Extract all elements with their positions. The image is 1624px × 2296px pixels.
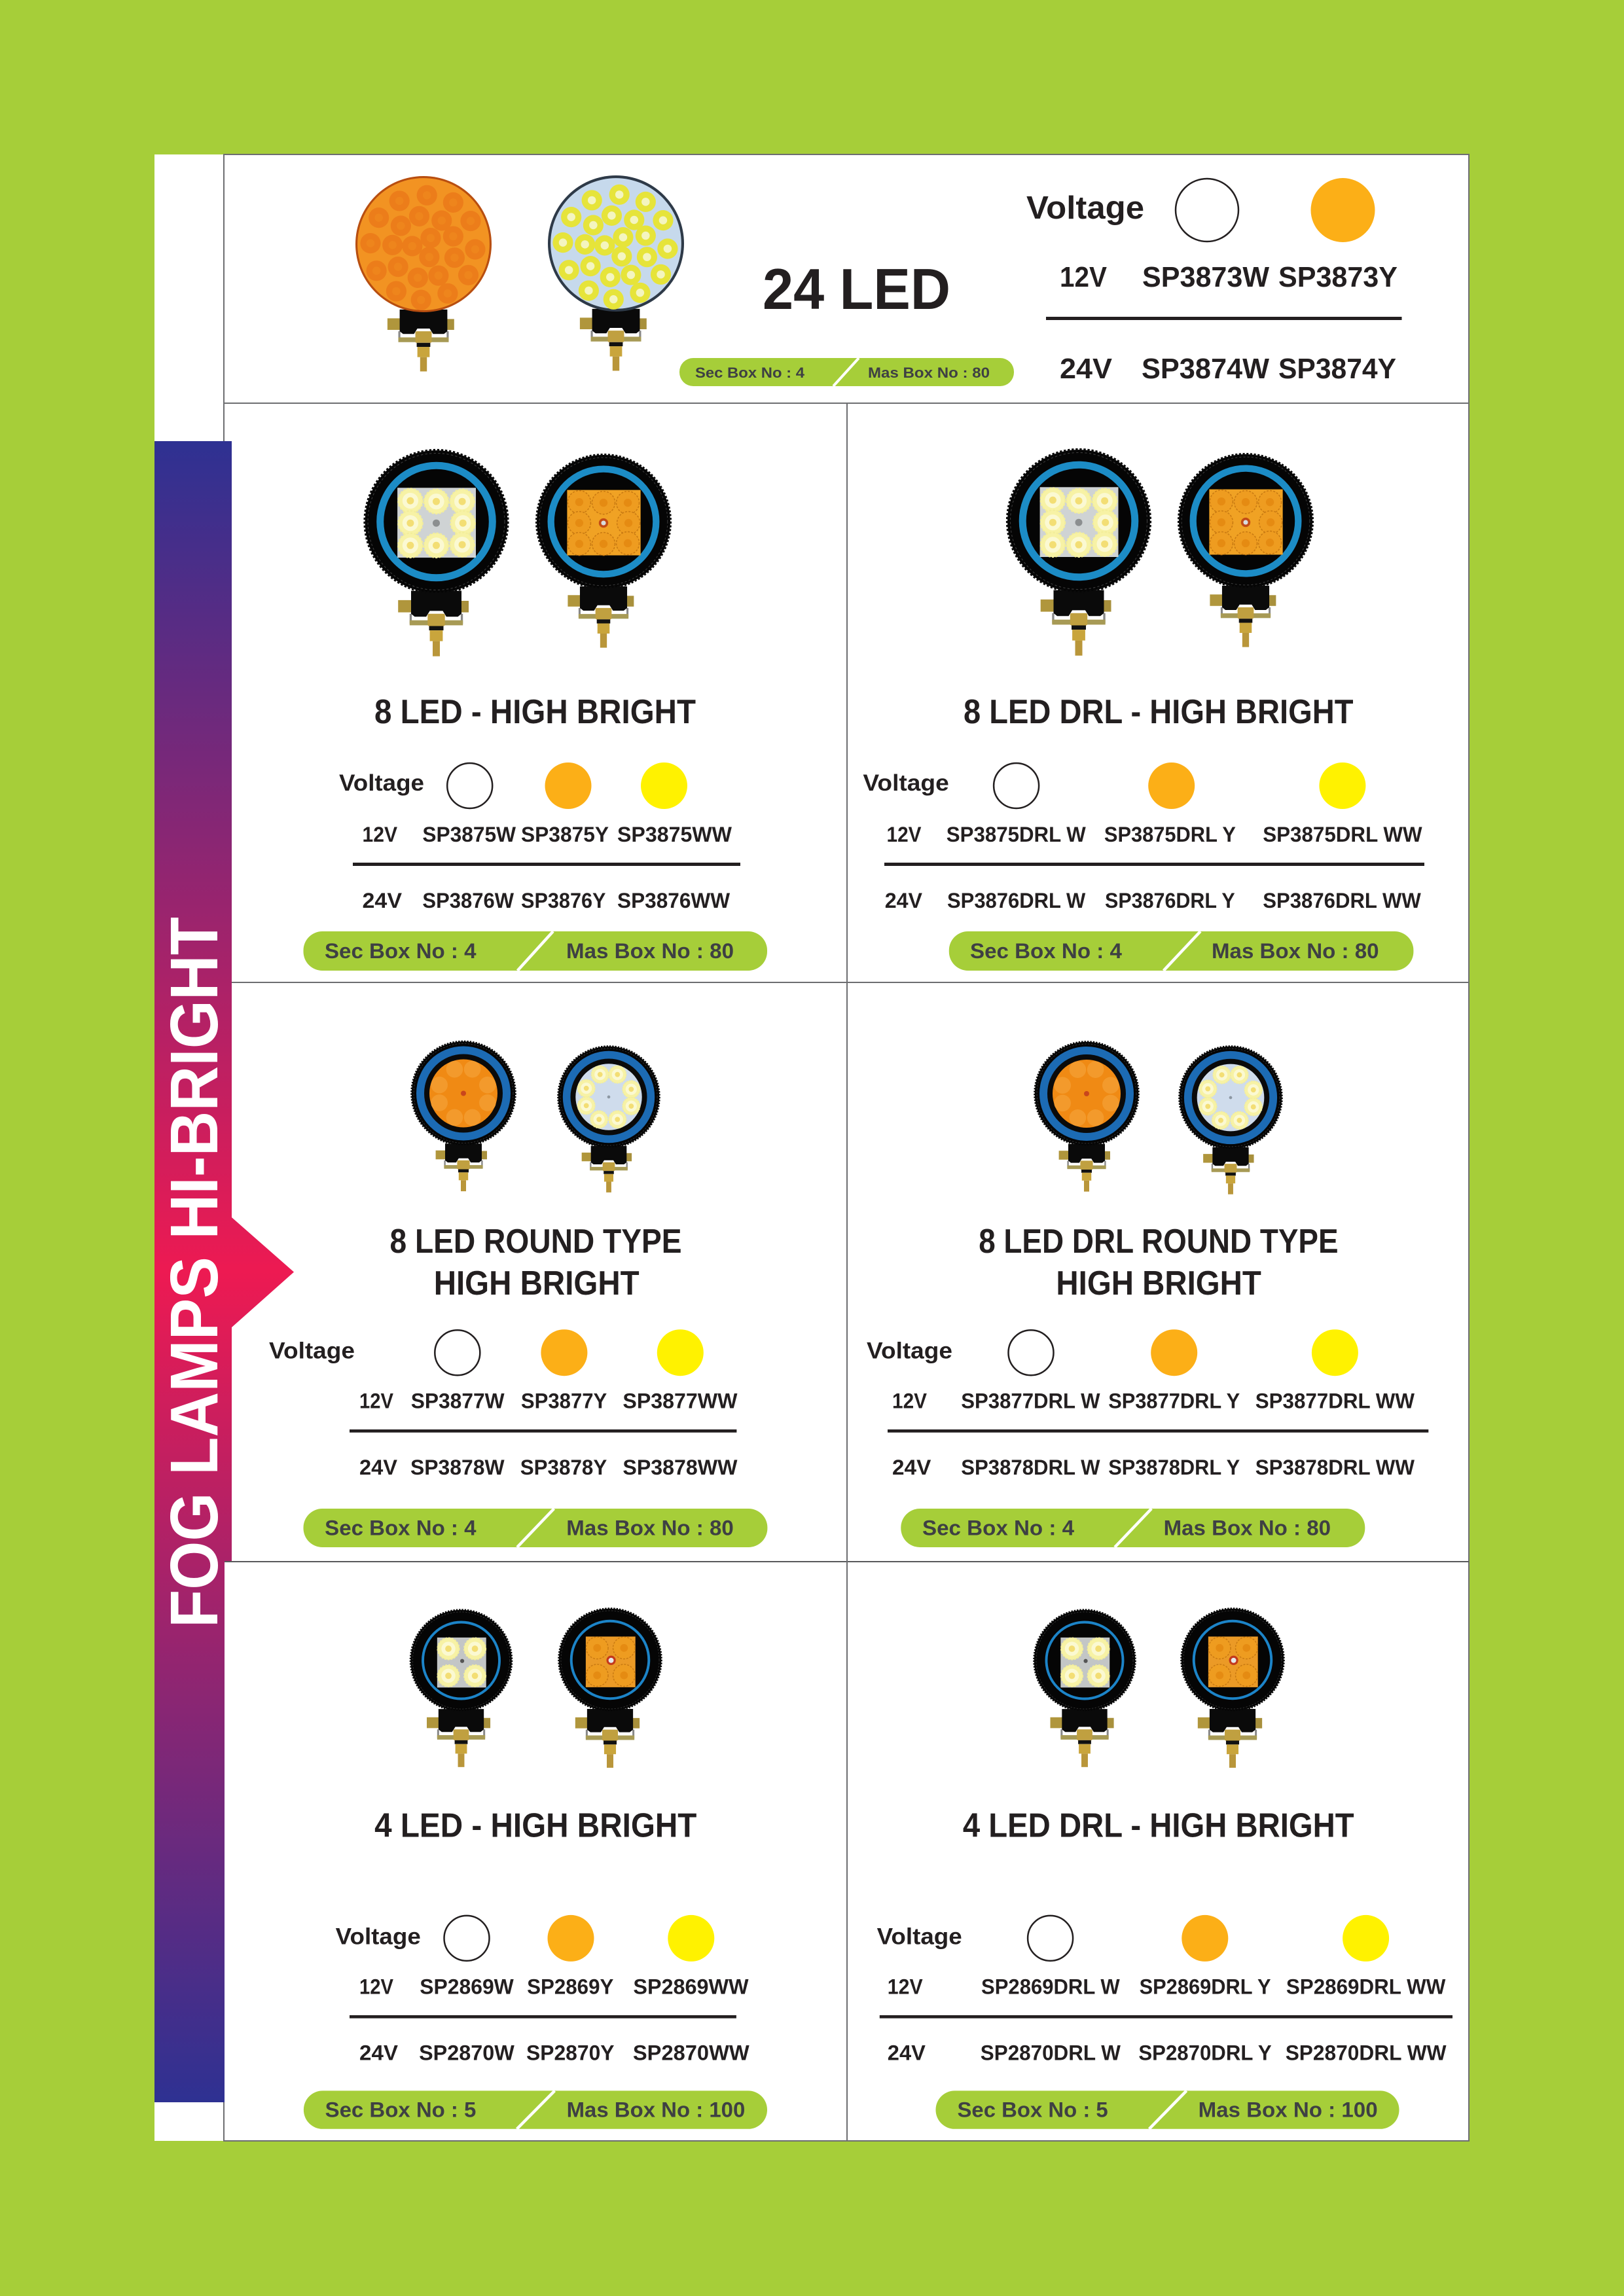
panel: 4 LED high bright (304, 1609, 767, 2129)
voltage table: SP2870DRL W (981, 2041, 1121, 2065)
sidebar banner: fog lamps hi-bright (154, 441, 294, 2102)
voltage table: SP2869DRL W (981, 1975, 1120, 1999)
icon: 24 LED amber lamp (355, 176, 492, 371)
voltage table: 12V (363, 823, 398, 846)
voltage table: SP3875DRL Y (1104, 823, 1236, 846)
voltage table: SP2869DRL WW (1286, 1975, 1446, 1999)
box quantity pill (304, 931, 767, 971)
voltage table: SP3875DRL WW (1263, 823, 1422, 846)
box quantity pill: Sec Box No : 4 (325, 1516, 477, 1539)
icon: 4 LED amber lamp (559, 1609, 661, 1768)
box quantity pill (949, 931, 1413, 971)
voltage table: SP3875W (422, 823, 516, 846)
panel: 24 LED (355, 175, 1402, 386)
voltage table: 24V (363, 889, 403, 912)
voltage table (339, 762, 740, 912)
box quantity pill (901, 1509, 1365, 1547)
box quantity pill: Mas Box No : 80 (1212, 939, 1379, 963)
box quantity pill: Mas Box No : 100 (1199, 2098, 1378, 2122)
box quantity pill: Sec Box No : 5 (325, 2098, 476, 2122)
voltage table (877, 1915, 1453, 2065)
voltage table: SP2869DRL Y (1140, 1975, 1271, 1999)
panel: 4 LED DRL high bright (877, 1609, 1453, 2129)
voltage table: 12V (1060, 261, 1108, 293)
voltage table: SP3877DRL W (961, 1389, 1100, 1412)
voltage table: Voltage (863, 770, 949, 796)
voltage table: SP3876W (422, 889, 514, 912)
voltage table: 12V (359, 1975, 394, 1999)
voltage table: SP3878Y (520, 1456, 607, 1479)
voltage table: Voltage (867, 1338, 952, 1364)
title: 24 LED: 24 LED (763, 257, 950, 321)
voltage table: SP3877W (411, 1389, 505, 1412)
icon: 8 LED DRL amber lamp (1179, 454, 1312, 647)
voltage table: SP3878DRL Y (1108, 1456, 1240, 1479)
box quantity pill: Mas Box No : 80 (566, 939, 734, 963)
heading: 8 LED ROUND TYPE (390, 1223, 682, 1261)
box quantity pill (936, 2090, 1399, 2129)
voltage table: Voltage (1026, 190, 1144, 226)
box quantity pill (304, 1509, 767, 1547)
icon: round amber lamp (412, 1041, 515, 1191)
heading: 8 LED DRL - HIGH BRIGHT (964, 693, 1354, 731)
voltage table: SP3873W (1142, 261, 1269, 293)
icon: 8 LED amber lamp (537, 455, 670, 648)
icon: 8 LED white lamp (365, 450, 507, 656)
voltage table: SP3875WW (617, 823, 732, 846)
box quantity pill (304, 2090, 767, 2129)
heading: 4 LED DRL - HIGH BRIGHT (963, 1807, 1354, 1845)
box quantity pill: Mas Box No : 80 (566, 1516, 734, 1539)
voltage table: SP2870Y (526, 2041, 614, 2065)
voltage table (269, 1329, 738, 1479)
voltage table: SP3877DRL WW (1255, 1389, 1415, 1412)
voltage table: 24V (885, 889, 923, 912)
voltage table: 24V (359, 1456, 398, 1479)
voltage table: SP2870WW (633, 2041, 750, 2065)
icon: round DRL white lamp (1180, 1047, 1282, 1194)
voltage table: SP3876DRL W (947, 889, 1086, 912)
voltage table: SP3877DRL Y (1108, 1389, 1240, 1412)
voltage table: 24V (888, 2041, 926, 2065)
voltage table: SP2869WW (633, 1975, 749, 1999)
box quantity pill: Sec Box No : 5 (957, 2098, 1108, 2122)
heading (979, 1223, 1339, 1302)
voltage table: SP3874Y (1278, 353, 1396, 385)
voltage table (867, 1329, 1428, 1479)
voltage table (1026, 178, 1402, 385)
voltage table: SP2870DRL Y (1138, 2041, 1272, 2065)
voltage table: 12V (886, 823, 922, 846)
icon: 4 LED DRL amber lamp (1182, 1609, 1284, 1768)
voltage table: SP3875DRL W (947, 823, 1087, 846)
voltage table: SP2870DRL WW (1286, 2041, 1447, 2065)
icon: round white lamp (558, 1047, 659, 1193)
heading: 8 LED - HIGH BRIGHT (374, 693, 696, 731)
box quantity pill: Sec Box No : 4 (325, 939, 477, 963)
box quantity pill: Mas Box No : 80 (1164, 1516, 1331, 1539)
heading: HIGH BRIGHT (1056, 1265, 1261, 1302)
box quantity pill (679, 358, 1014, 386)
icon: 4 LED DRL white lamp (1034, 1610, 1135, 1767)
heading: 4 LED - HIGH BRIGHT (374, 1807, 697, 1845)
voltage table: Voltage (877, 1924, 962, 1950)
voltage table: SP3876Y (521, 889, 606, 912)
voltage table: 12V (359, 1389, 394, 1412)
panel: 8 LED round type (269, 1041, 767, 1547)
voltage table: 24V (892, 1456, 931, 1479)
voltage table: 24V (1060, 353, 1113, 385)
voltage table: SP3876WW (617, 889, 731, 912)
sidebar banner: fog lamps hi-bright: FOG LAMPS HI-BRIGHT (156, 917, 232, 1628)
heading (390, 1223, 682, 1302)
panel: 8 LED DRL round type (867, 1042, 1428, 1547)
voltage table: SP3874W (1142, 353, 1269, 385)
voltage table: SP3878DRL W (961, 1456, 1100, 1479)
voltage table: SP3876DRL Y (1105, 889, 1235, 912)
voltage table: SP3877WW (623, 1389, 738, 1412)
heading: 8 LED DRL ROUND TYPE (979, 1223, 1339, 1261)
voltage table: SP2870W (419, 2041, 515, 2065)
icon: round DRL amber lamp (1035, 1042, 1138, 1192)
voltage table: 24V (359, 2041, 399, 2065)
heading: HIGH BRIGHT (434, 1265, 640, 1302)
box quantity pill: Sec Box No : 4 (922, 1516, 1074, 1539)
voltage table: 12V (892, 1389, 928, 1412)
box quantity pill: Sec Box No : 4 (695, 365, 805, 381)
panel: 8 LED DRL high bright (863, 450, 1424, 971)
voltage table: Voltage (269, 1338, 355, 1364)
voltage table: SP3877Y (521, 1389, 607, 1412)
voltage table: SP3878WW (623, 1456, 738, 1479)
voltage table (336, 1915, 750, 2065)
voltage table: SP2869Y (527, 1975, 613, 1999)
box quantity pill: Sec Box No : 4 (970, 939, 1122, 963)
panel: 8 LED high bright (304, 450, 767, 971)
icon: 8 LED DRL white lamp (1007, 450, 1150, 656)
voltage table: Voltage (336, 1924, 421, 1950)
box quantity pill: Mas Box No : 100 (567, 2098, 745, 2122)
voltage table: 12V (888, 1975, 923, 1999)
icon: 24 LED white lamp (548, 175, 684, 370)
voltage table: SP3876DRL WW (1263, 889, 1422, 912)
voltage table: Voltage (339, 770, 424, 796)
voltage table: SP3878W (410, 1456, 505, 1479)
voltage table: SP3878DRL WW (1255, 1456, 1415, 1479)
voltage table (863, 762, 1424, 912)
voltage table: SP2869W (420, 1975, 514, 1999)
voltage table: SP3873Y (1278, 261, 1398, 293)
voltage table: SP3875Y (521, 823, 609, 846)
box quantity pill: Mas Box No : 80 (868, 365, 990, 381)
icon: 4 LED white lamp (410, 1610, 512, 1767)
